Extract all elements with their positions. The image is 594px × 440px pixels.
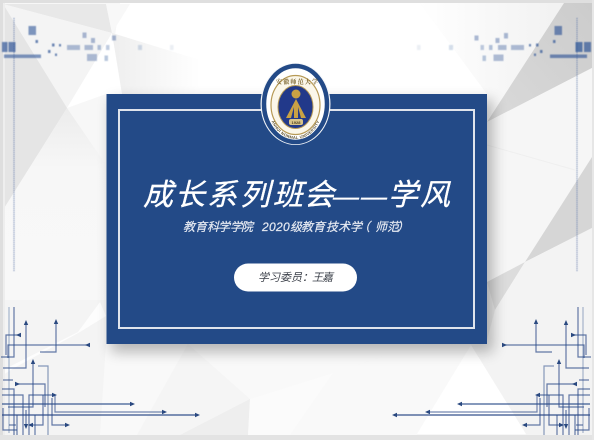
panel: blue title card [106,94,487,344]
subtitle: 教育科学学院2020级教育技术学（师范） [183,220,409,234]
icon: university emblem: ANHUI NORMAL UNIVERSITY [272,120,319,139]
decoration: bottom-right circuit lines [394,307,591,435]
icon: university emblem [260,63,330,145]
card shadow [111,100,493,352]
icon: university emblem: 1928 [292,120,301,125]
icon: university emblem: 安徽师范大学 [276,78,319,86]
title: —— [332,181,388,211]
button: presenter pill [234,264,357,292]
decoration: bottom-left circuit lines [1,307,198,435]
button: presenter pill: 学习委员：王嘉 [258,271,335,284]
title: 学风 [388,179,451,212]
decoration: top-left pixel squares [2,18,174,272]
title: 成长系列班会 [143,179,337,212]
decoration: top-right pixel squares [417,18,591,272]
inner white frame [119,110,474,328]
